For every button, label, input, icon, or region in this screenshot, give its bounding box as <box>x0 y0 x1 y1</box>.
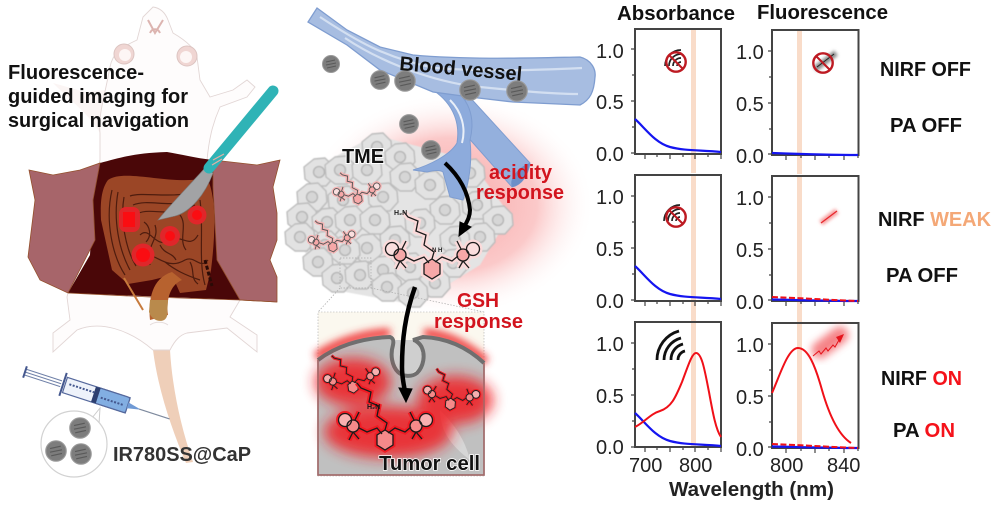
column heading: fluorescence: Fluorescence <box>757 2 888 24</box>
label: acidity response <box>476 162 564 204</box>
label: tumor cell: Tumor cell <box>379 453 480 475</box>
tail <box>153 350 193 463</box>
icon: ultrasound waves <box>657 331 685 360</box>
column heading: absorbance: Absorbance <box>617 3 735 25</box>
chart: fluorescence on: 0.5 <box>736 387 764 409</box>
tumour cell panel: H₂N <box>367 404 380 411</box>
chart: fluorescence off: 0.0 <box>736 146 764 168</box>
chart: absorbance off: 1.0 <box>596 41 624 63</box>
right skin flap <box>213 160 280 302</box>
endocytic pit interior <box>391 340 422 375</box>
label: GSH response <box>434 290 523 333</box>
panel border <box>318 358 484 476</box>
big branch <box>465 92 530 187</box>
label: GSH response: GSH <box>457 290 499 312</box>
tumour microenvironment glow <box>305 93 595 317</box>
chart: fluorescence off: 0.5 <box>736 94 764 116</box>
zoom guide <box>318 258 484 312</box>
label: blood vessel: Blood vessel <box>399 53 523 86</box>
arrow: to molecule <box>445 163 471 236</box>
blood vessel <box>308 8 595 200</box>
chart: fluorescence on <box>736 323 858 461</box>
heading: fluorescence-guided imaging: guided imaging for <box>8 86 188 108</box>
activated molecule <box>386 210 480 279</box>
x tick labels <box>629 455 860 477</box>
mouse illustration <box>28 7 280 463</box>
intestines <box>101 176 214 321</box>
arrow: into cell <box>399 287 415 402</box>
small molecule lower <box>306 215 357 255</box>
chart: absorbance weak: 0.0 <box>596 291 624 313</box>
chart: absorbance on: 0.5 <box>596 386 624 408</box>
cell interior <box>318 337 484 475</box>
chart: absorbance off: 0.0 <box>596 144 624 166</box>
status: NIRF WEAK: NIRF WEAK <box>878 209 992 231</box>
chart: absorbance on: 1.0 <box>596 334 624 356</box>
chart: absorbance off <box>596 29 721 166</box>
cell glow <box>316 333 486 362</box>
label: TME: TME <box>342 146 384 168</box>
label: acidity response: response <box>476 182 564 204</box>
activated molecule: N H <box>432 248 442 254</box>
chart: fluorescence off <box>736 30 858 168</box>
small branch <box>413 90 472 200</box>
chart: fluorescence weak: 0.0 <box>736 292 764 314</box>
activated molecule: H₂N <box>394 210 407 217</box>
icon: weak fluorescence <box>821 211 837 223</box>
mouse arm left faint <box>53 83 105 133</box>
chart: fluorescence off: 1.0 <box>736 42 764 64</box>
x tick labels: 800 <box>770 455 803 477</box>
heading: fluorescence-guided imaging: surgical navigation <box>8 110 189 132</box>
icon: no ultrasound <box>665 50 686 72</box>
red drug glow <box>315 358 493 458</box>
status: PA OFF: PA OFF <box>886 265 958 287</box>
small molecule upper <box>331 167 382 207</box>
icon: fluorescence emission <box>813 334 844 356</box>
abdominal cavity <box>68 152 240 300</box>
chart: absorbance on: 0.0 <box>596 437 624 459</box>
808 nm excitation bands <box>691 30 802 448</box>
tumour cell panel <box>315 312 493 476</box>
activated molecules in cell <box>321 349 382 397</box>
status: NIRF OFF: NIRF OFF <box>880 59 971 81</box>
icon: no ultrasound <box>664 205 686 227</box>
chart: absorbance off: 0.5 <box>596 92 624 114</box>
heading: fluorescence-guided imaging <box>8 62 189 132</box>
chart: fluorescence weak: 0.5 <box>736 240 764 262</box>
chart: fluorescence on: 1.0 <box>736 335 764 357</box>
label: acidity response: acidity <box>489 162 553 184</box>
chart: absorbance on <box>596 322 721 459</box>
status: PA OFF: PA OFF <box>890 115 962 137</box>
chart: fluorescence weak: 1.0 <box>736 188 764 210</box>
bottom skin strip <box>68 293 277 302</box>
nanoparticle bubble <box>41 408 107 477</box>
x tick labels: 840 <box>827 455 860 477</box>
fluorescent tumour spots <box>119 206 206 266</box>
membrane <box>318 337 484 376</box>
chart: fluorescence weak <box>736 176 858 314</box>
chart: absorbance weak: 1.0 <box>596 187 624 209</box>
status: PA ON: PA ON <box>893 420 955 442</box>
heading: fluorescence-guided imaging: Fluorescence- <box>8 62 144 84</box>
label: IR780SS@CaP: IR780SS@CaP <box>113 444 251 466</box>
mouse body <box>53 7 257 352</box>
label: GSH response: response <box>434 311 523 333</box>
chart: absorbance weak <box>596 175 721 313</box>
chart: fluorescence on: 0.0 <box>736 439 764 461</box>
scalpel <box>158 91 273 220</box>
icon: no fluorescence <box>813 53 836 73</box>
x tick labels: 800 <box>679 455 712 477</box>
mouse ears <box>114 44 197 66</box>
x tick labels: 700 <box>629 455 662 477</box>
status: NIRF ON: NIRF ON <box>881 368 962 390</box>
circulating nanoparticles <box>322 56 527 159</box>
syringe <box>21 361 173 430</box>
tumour cell cluster <box>285 133 513 307</box>
left skin flap <box>28 163 100 293</box>
x axis title: Wavelength (nm) <box>669 479 834 501</box>
main vessel <box>308 8 595 105</box>
chart: absorbance weak: 0.5 <box>596 239 624 261</box>
